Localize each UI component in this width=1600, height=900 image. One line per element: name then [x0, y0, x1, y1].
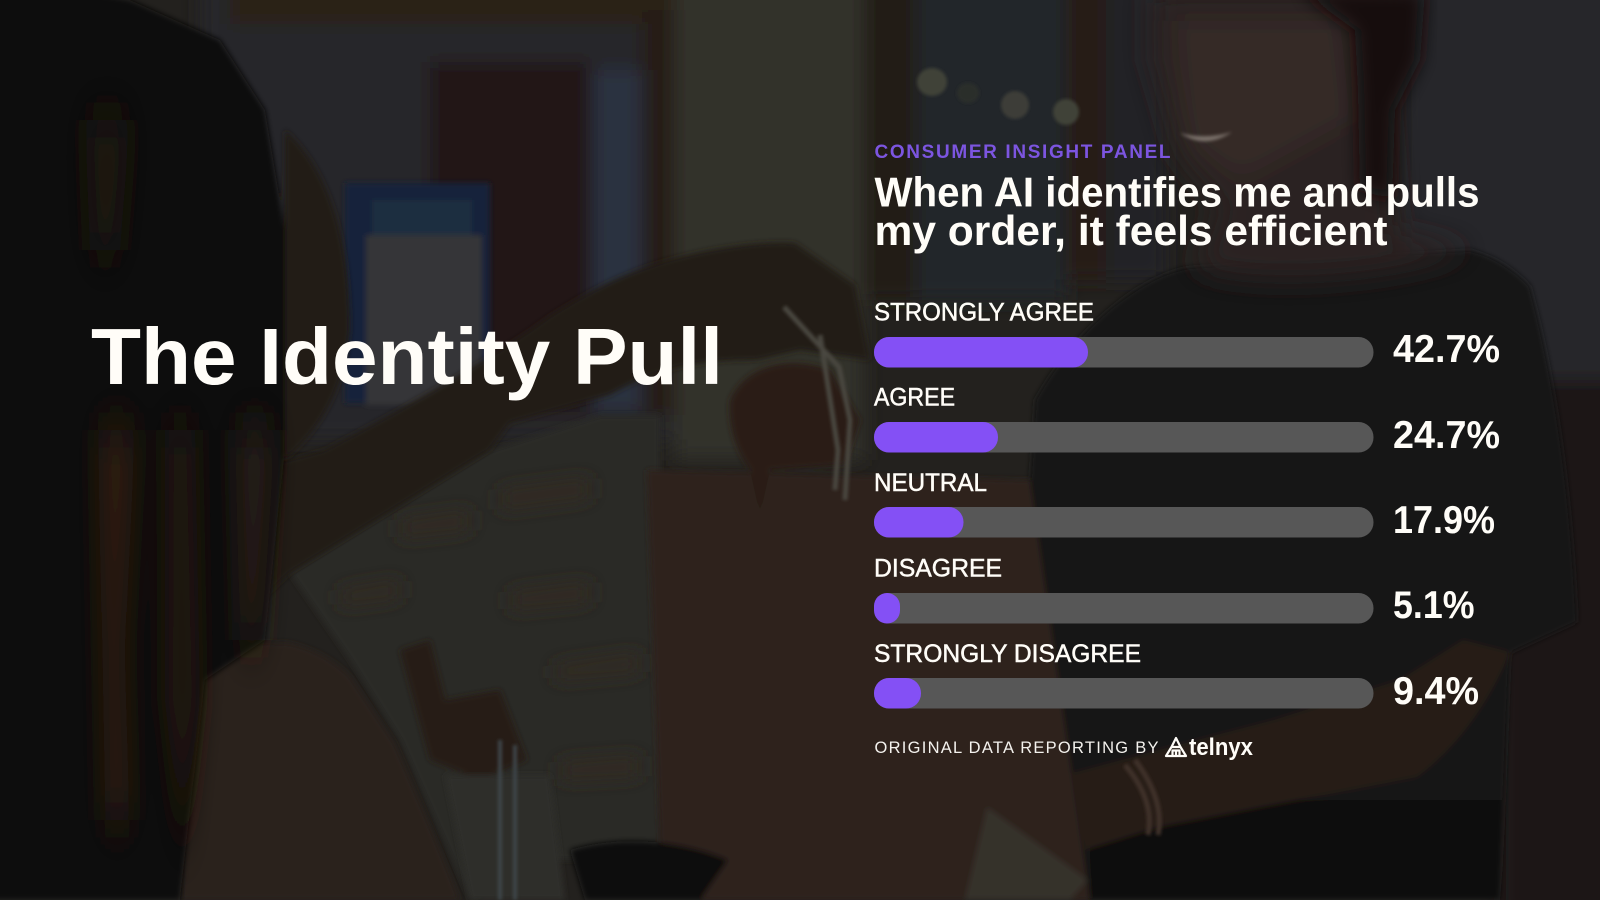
server's face and neck [1150, 0, 1470, 280]
arm and hands [240, 242, 870, 620]
server's forearm [1073, 640, 1510, 850]
plush and cup [400, 640, 527, 780]
bar chart: agreement responses [874, 298, 1500, 713]
paper bag [647, 470, 1090, 900]
eyebrow label: CONSUMER INSIGHT PANEL [874, 142, 1171, 163]
panel: consumer insight survey [874, 142, 1500, 761]
lit wall with blinds [290, 415, 660, 900]
row: strongly disagree 9.4%: 9.4% [1393, 670, 1479, 713]
row: strongly agree 42.7% [874, 298, 1500, 371]
row: neutral 17.9% [874, 469, 1495, 542]
row: strongly agree 42.7%: 42.7% [1393, 328, 1500, 371]
decorative detail [917, 68, 947, 96]
row: agree 24.7%: AGREE [874, 384, 955, 412]
server's shirt [1030, 250, 1577, 900]
survey statement heading [874, 168, 1480, 254]
icon: telnyx logo mark [1166, 738, 1186, 756]
row: agree 24.7%: 24.7% [1393, 414, 1500, 457]
shoulder of customer [181, 642, 460, 900]
row: neutral 17.9%: NEUTRAL [874, 469, 987, 497]
title: The Identity Pull [91, 312, 723, 401]
row: agree 24.7% [874, 384, 1500, 457]
row: disagree 5.1% [874, 554, 1474, 627]
row: disagree 5.1%: 5.1% [1393, 584, 1474, 627]
survey statement heading: my order, it feels efficient [874, 207, 1388, 254]
survey statement heading: When AI identifies me and pulls [874, 168, 1480, 216]
sign [345, 183, 490, 403]
footer: data attribution [874, 734, 1254, 761]
row: strongly disagree 9.4%: STRONGLY DISAGREE [874, 640, 1141, 668]
telnyx wordmark: telnyx [1189, 734, 1254, 761]
row: disagree 5.1%: DISAGREE [874, 554, 1002, 582]
footer: data attribution: ORIGINAL DATA REPORTING BY [874, 739, 1158, 757]
row: strongly agree 42.7%: STRONGLY AGREE [874, 298, 1094, 326]
seated woman's hair [0, 0, 300, 900]
row: neutral 17.9%: 17.9% [1393, 499, 1495, 542]
row: strongly disagree 9.4% [874, 640, 1479, 713]
